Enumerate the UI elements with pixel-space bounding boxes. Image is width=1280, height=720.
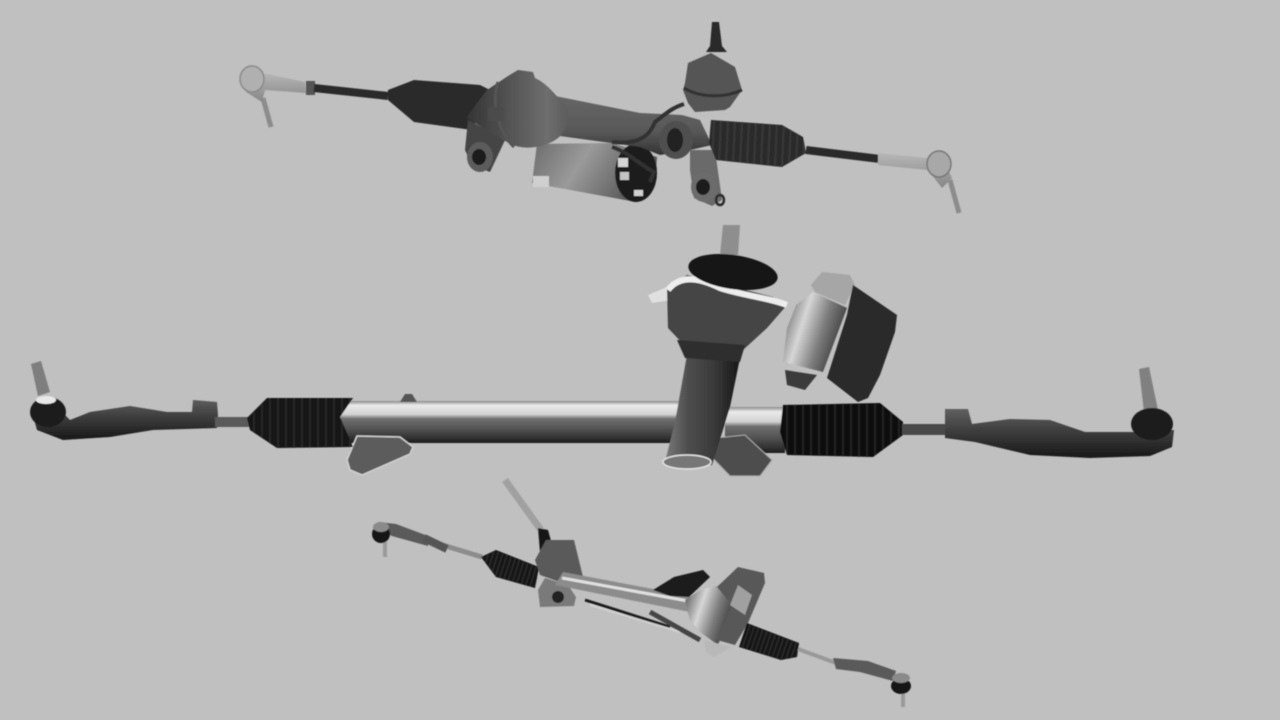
input shaft: [706, 22, 727, 52]
input shaft: [505, 480, 541, 530]
tube highlight: [562, 578, 688, 601]
left boot: [481, 550, 539, 588]
bell flange ring: [495, 82, 514, 147]
right inner rod: [806, 150, 880, 159]
housing bright flange: [668, 279, 787, 305]
right tie rod arm: [945, 409, 1174, 458]
left boot ribs: [252, 398, 351, 448]
valve housing junction: [659, 121, 693, 159]
right boot: [709, 120, 806, 167]
left stud: [383, 540, 387, 557]
left mounting eye: [465, 120, 505, 172]
right ball: [891, 678, 911, 694]
junction port: [667, 128, 683, 152]
housing left tab: [648, 287, 672, 303]
left inner rod: [314, 88, 388, 96]
bell lug: [488, 107, 504, 121]
left mount bracket: [347, 436, 413, 475]
hydraulic pipes: [612, 104, 684, 182]
left rod: [426, 540, 482, 557]
upper housing body: [667, 275, 787, 350]
block port: [552, 591, 564, 603]
lower tab: [704, 640, 731, 657]
right boot: [739, 623, 799, 660]
left ball joint: [30, 397, 66, 427]
left tie rod stud: [263, 98, 271, 127]
right tie rod stud: [950, 180, 959, 213]
motor top lug: [811, 272, 855, 305]
left boot ribs: [480, 563, 540, 582]
right boot ribs: [785, 403, 901, 457]
left tie rod ball: [240, 66, 264, 92]
right boot ribs: [738, 630, 802, 652]
ball joint highlight: [36, 396, 56, 404]
left tie rod arm: [32, 398, 218, 440]
right boot: [780, 403, 903, 457]
pinion lower block: [538, 578, 576, 607]
bottom steering rack: [372, 480, 911, 707]
dark fan cover: [653, 570, 710, 597]
lower bracket right: [695, 435, 772, 476]
right rod: [798, 649, 836, 663]
motor end cap: [533, 144, 657, 202]
shaft boot: [538, 528, 553, 552]
housing lower neck: [677, 340, 745, 362]
motor connector: [785, 370, 817, 390]
pinion column: [665, 355, 740, 465]
left collar: [306, 81, 315, 95]
left tie rod light section: [246, 72, 306, 102]
tower flange line: [684, 88, 742, 96]
right inner rod: [902, 424, 946, 435]
motor silver ring: [783, 292, 847, 372]
left ball cap: [373, 522, 389, 532]
rack tube: [555, 572, 690, 612]
right ball joint: [1131, 408, 1173, 440]
right stud: [1139, 367, 1158, 412]
boot ribs: [705, 142, 810, 147]
left boot: [388, 80, 490, 130]
lower pipes: [585, 600, 700, 640]
middle steering rack: [30, 225, 1174, 476]
input shaft: [720, 225, 740, 255]
left inner rod: [215, 417, 251, 427]
top steering rack: [240, 22, 959, 213]
right tie rod ball: [927, 151, 951, 177]
left rod joint: [424, 538, 447, 549]
motor cylinder: [532, 143, 657, 202]
right stud: [901, 688, 905, 707]
right arm: [833, 658, 896, 681]
motor cover: [717, 567, 765, 645]
right tie rod light section: [878, 152, 952, 188]
left arm: [378, 522, 428, 546]
left stud: [31, 361, 50, 396]
small tube stud: [400, 394, 417, 402]
left boot: [247, 398, 353, 448]
reduction bell housing: [466, 70, 568, 148]
right ball cap: [892, 673, 910, 683]
cover fins: [730, 585, 752, 615]
pinion housing: [535, 540, 583, 582]
motor silver body: [685, 585, 735, 645]
black isolator disc: [686, 249, 780, 295]
left ball: [372, 525, 390, 543]
right mounting eye: [690, 150, 724, 206]
right tube section: [725, 407, 785, 453]
main rack tube: [340, 401, 680, 443]
pinion tower dome: [683, 53, 742, 112]
motor dark cover: [827, 285, 897, 402]
column foot ring: [663, 455, 711, 469]
main tube: [555, 96, 712, 155]
